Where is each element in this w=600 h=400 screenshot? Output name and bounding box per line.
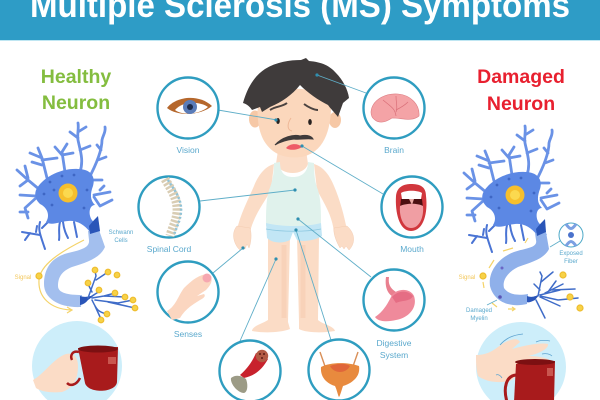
damaged axon sheath <box>490 232 549 305</box>
label: signal: Signal <box>459 275 475 281</box>
ears <box>249 110 261 128</box>
neck <box>276 150 308 173</box>
person <box>234 58 354 332</box>
cell body <box>35 169 100 232</box>
mouth <box>286 144 302 150</box>
heading: damaged neuron: Neuron <box>487 93 555 115</box>
icon: hand <box>167 274 212 320</box>
face <box>258 89 331 157</box>
icon: muscle fibre <box>231 350 268 393</box>
signal dots <box>92 267 98 273</box>
illustration: shaking hand with cup <box>476 322 566 400</box>
label: Mouth <box>400 244 424 254</box>
symptom: spinal cord <box>138 176 200 254</box>
label: Senses <box>174 329 202 339</box>
icon: brain <box>371 94 419 122</box>
icon: bladder <box>320 352 359 397</box>
eyes <box>276 118 280 124</box>
symptom: muscle <box>220 340 280 400</box>
cup <box>514 360 555 400</box>
inset: exposed fiber <box>559 223 583 247</box>
icon: stomach <box>375 277 415 321</box>
healthy neuron diagram <box>15 123 138 323</box>
label: damaged myelin: Damaged <box>466 308 492 314</box>
heading: healthy neuron: Neuron <box>42 92 110 114</box>
arms <box>237 164 274 232</box>
header banner <box>0 0 600 41</box>
dendrites <box>464 126 559 221</box>
nucleus <box>58 184 78 202</box>
shorts <box>266 223 322 242</box>
hand <box>476 339 553 382</box>
moustache <box>275 135 313 145</box>
heading: damaged neuron: Damaged <box>477 66 565 88</box>
symptom: vision <box>158 78 218 155</box>
broken signal dashes <box>483 238 528 311</box>
label: Digestive <box>377 338 412 348</box>
signal arrow <box>39 240 84 313</box>
label: Spinal Cord <box>147 244 191 254</box>
nose <box>288 118 292 131</box>
label: exposed fiber: Fiber <box>564 259 578 265</box>
label: signal: Signal <box>15 275 31 281</box>
dendrites <box>17 123 112 218</box>
heading: healthy neuron: Healthy <box>41 66 111 88</box>
axon sheath <box>44 230 105 307</box>
axon terminal <box>527 294 540 302</box>
label: Vision <box>176 145 200 155</box>
hand <box>33 354 78 392</box>
signal dots <box>560 272 566 278</box>
connector lines <box>200 73 383 341</box>
eyebrows <box>270 103 318 110</box>
hands <box>234 226 251 250</box>
label: exposed fiber: Exposed <box>559 251 583 257</box>
cup <box>78 347 118 391</box>
cell body <box>482 172 547 235</box>
icon: spine <box>165 179 181 236</box>
symptom: senses <box>158 262 218 339</box>
axon terminal <box>80 295 95 305</box>
icon: eye <box>167 98 212 114</box>
label: schwann cells: Schwann <box>109 230 133 236</box>
label: Brain <box>384 145 404 155</box>
tank top <box>266 162 321 226</box>
label: System <box>380 350 408 360</box>
symptom: brain <box>364 78 424 155</box>
hair <box>243 58 349 117</box>
symptom: bladder <box>308 340 370 400</box>
symptom: digestive system <box>364 270 424 360</box>
legs <box>252 236 290 332</box>
illustration: steady hand holding cup <box>32 321 122 400</box>
tremor marks <box>496 334 552 378</box>
icon: open mouth <box>396 184 426 231</box>
nucleus <box>506 186 524 204</box>
damaged neuron diagram <box>459 126 583 322</box>
label: schwann cells: Cells <box>114 238 128 244</box>
label: damaged myelin: Myelin <box>470 316 488 322</box>
symptom: mouth <box>382 176 442 254</box>
